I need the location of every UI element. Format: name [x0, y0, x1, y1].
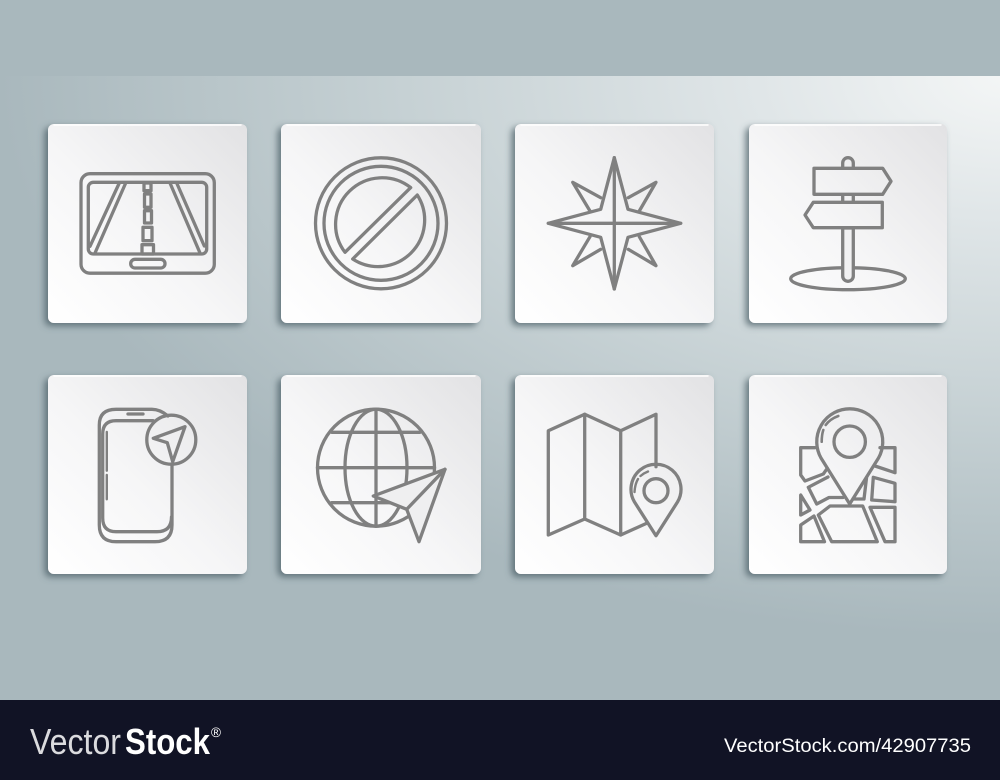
footer bar	[0, 700, 1000, 780]
logo: VectorStock: Stock	[125, 721, 211, 762]
background top band	[0, 0, 1000, 76]
image id text: VectorStock.com/42907735	[724, 735, 971, 757]
background gradient area	[0, 76, 1000, 700]
panel: wind rose	[515, 124, 714, 323]
panel: smartphone navigation	[48, 375, 247, 574]
panel: folded map with pin	[515, 375, 714, 574]
icon: tablet with road	[81, 174, 214, 273]
logo: VectorStock: ®	[211, 724, 222, 740]
icon: compass star	[548, 158, 681, 289]
logo: VectorStock	[30, 721, 222, 762]
panel: road signpost	[749, 124, 947, 323]
panel: global paper plane	[281, 375, 481, 574]
icon: signpost	[791, 158, 905, 290]
icon: phone with arrow	[99, 409, 196, 542]
icon: globe with plane	[318, 409, 445, 542]
background light glow	[0, 76, 1000, 700]
panel: city map with pin	[749, 375, 947, 574]
icon: map and location pin	[548, 414, 681, 536]
panel: navigator tablet	[48, 124, 247, 323]
panel: no entry sign	[281, 124, 481, 323]
icon: prohibition circle	[316, 158, 446, 289]
icon: street map and pin	[801, 409, 895, 542]
logo: VectorStock: Vector	[30, 721, 121, 762]
